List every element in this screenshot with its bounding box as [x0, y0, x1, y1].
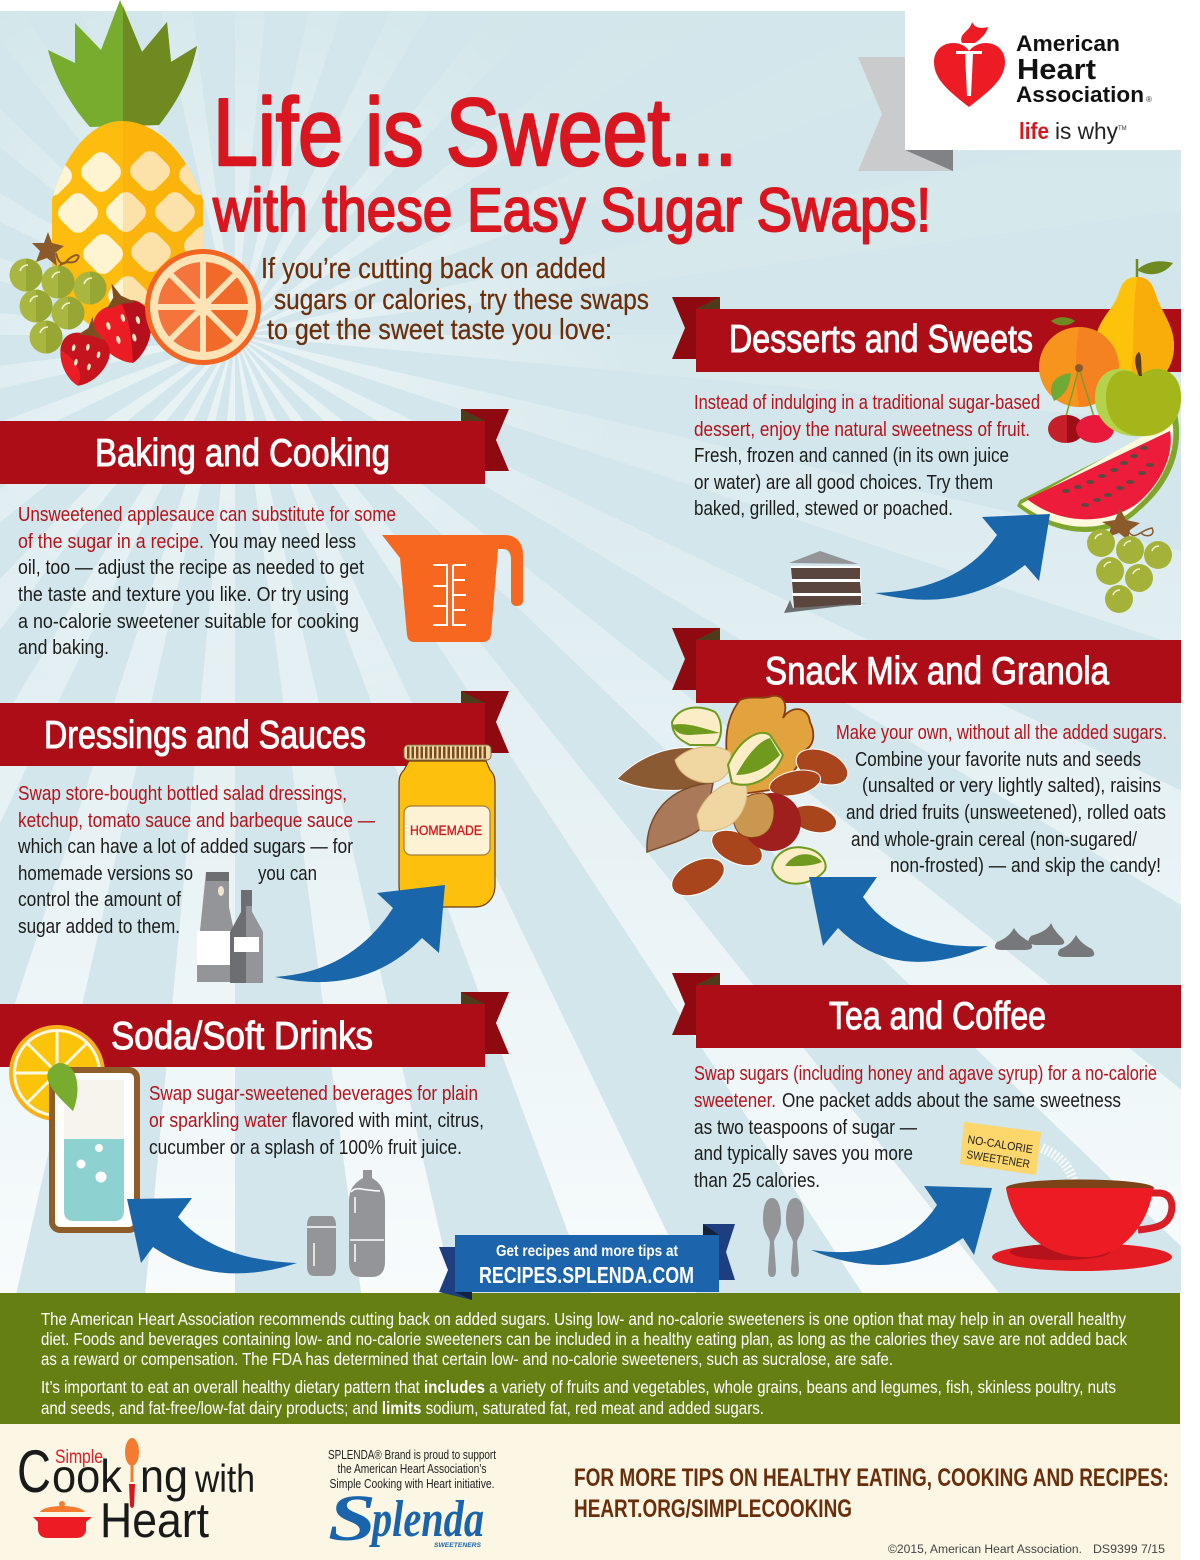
- body text: flavored with mint, citrus,: [292, 1109, 484, 1132]
- American Heart Association logo: Heart: [1017, 54, 1096, 86]
- body text: the taste and texture you like. Or try using: [18, 583, 349, 606]
- icon: lemon slice: [9, 1025, 105, 1121]
- body text: [17, 782, 375, 938]
- icon: homemade jar: HOMEMADE: [410, 822, 482, 838]
- body text: and baking.: [18, 636, 109, 659]
- ribbon heading: Soda/Soft Drinks: [111, 1015, 373, 1058]
- icon: homemade jar: [399, 745, 495, 907]
- intro text: [261, 253, 649, 346]
- callout: recipes banner: Get recipes and more tips at: [496, 1243, 679, 1260]
- panel: footer: [0, 1424, 1181, 1560]
- body text: [836, 721, 1167, 877]
- intro text: If you’re cutting back on added: [261, 253, 606, 285]
- logo ribbon: [858, 57, 953, 171]
- intro text: to get the sweet taste you love:: [267, 314, 612, 346]
- icon: spoons: [763, 1198, 804, 1277]
- icon: sweetener packet: NO-CALORIE: [967, 1134, 1034, 1156]
- body text: [149, 1082, 484, 1159]
- ribbon heading: Dressings and Sauces: [44, 714, 366, 757]
- ribbon heading: [672, 973, 1181, 1048]
- body text: a no-calorie sweetener suitable for cooking: [18, 610, 359, 633]
- icon: grapes top left: [10, 232, 106, 354]
- panel: dressings and sauces: [0, 691, 509, 983]
- title: with these Easy Sugar Swaps!: [212, 176, 931, 244]
- copyright: DS9399 7/15: [1093, 1544, 1165, 1556]
- body text: of the sugar in a recipe.: [18, 530, 204, 553]
- American Heart Association logo: ®: [1146, 95, 1152, 104]
- body text: ketchup, tomato sauce and barbeque sauce —: [18, 809, 375, 832]
- logo: Splenda: S: [328, 1482, 376, 1555]
- body text: or water) are all good choices. Try them: [694, 471, 993, 494]
- body text: Swap sugar-sweetened beverages for plain: [149, 1082, 478, 1105]
- logo: Simple Cooking with Heart: Simple: [55, 1447, 103, 1468]
- body text: [18, 503, 396, 659]
- body text: and typically saves you more: [694, 1142, 913, 1165]
- ribbon heading: Tea and Coffee: [829, 995, 1046, 1038]
- body text: [694, 391, 1040, 520]
- title: Life is Sweet...: [213, 79, 737, 186]
- callout: recipes banner: RECIPES.SPLENDA.COM: [479, 1262, 694, 1288]
- arrow: [275, 885, 445, 982]
- copyright: ©2015, American Heart Association.: [888, 1544, 1082, 1556]
- body text: You may need less: [209, 530, 356, 553]
- body text: One packet adds about the same sweetness: [782, 1089, 1121, 1112]
- icon: pineapple: [48, 0, 203, 333]
- logo: Simple Cooking with Heart: with: [194, 1458, 255, 1501]
- American Heart Association logo: [905, 11, 1181, 150]
- ribbon heading: Snack Mix and Granola: [765, 650, 1109, 693]
- icon: measuring cup: [382, 535, 523, 642]
- body text: [694, 1062, 1157, 1192]
- panel: tea and coffee: [672, 973, 1181, 1277]
- panel: green recommendation band: and seeds, and fat-free/low-fat dairy products; and limits sodium, saturated fat, red meat and added sugars.: [41, 1398, 764, 1418]
- logo: Simple Cooking with Heart: ng: [140, 1450, 188, 1502]
- ribbon heading: [672, 297, 1181, 372]
- American Heart Association logo: life: [1019, 118, 1049, 144]
- arrow: [809, 877, 988, 962]
- Splenda statement: the American Heart Association’s: [338, 1462, 486, 1476]
- icon: grapes right: [1087, 508, 1172, 613]
- panel: baking and cooking: [0, 409, 523, 659]
- copyright: [888, 1544, 1165, 1556]
- panel: green recommendation band: as a reward or compensation. The FDA has determined that certain low- and no-calorie sweeteners, such as sucralose, are safe.: [41, 1349, 893, 1369]
- call to action: HEART.ORG/SIMPLECOOKING: [574, 1495, 852, 1523]
- icon: fruit pile: [1017, 259, 1181, 532]
- body text: which can have a lot of added sugars — for: [17, 835, 353, 858]
- logo: Splenda: [328, 1482, 484, 1555]
- body text: and whole-grain cereal (non-sugared/: [851, 828, 1137, 851]
- body text: sugar added to them.: [18, 915, 180, 938]
- icon: can and soda bottle: [307, 1170, 385, 1277]
- panel: green recommendation band: [0, 1293, 1180, 1424]
- American Heart Association logo: is why: [1055, 118, 1118, 144]
- ribbon heading: [672, 628, 1181, 703]
- Splenda statement: [328, 1448, 496, 1491]
- body text: Instead of indulging in a traditional sugar-based: [694, 391, 1040, 414]
- icon: chocolate chips: [995, 923, 1094, 957]
- body text: Swap store-bought bottled salad dressings,: [18, 782, 347, 805]
- Splenda statement: Simple Cooking with Heart initiative.: [330, 1477, 494, 1491]
- body text: sweetener.: [694, 1089, 776, 1112]
- icon: store-bought bottles: [197, 872, 263, 983]
- panel: snack mix and granola: [617, 628, 1181, 962]
- icon: sweetener packet: SWEETENER: [966, 1149, 1031, 1171]
- panel: desserts and sweets: [672, 259, 1181, 613]
- body text: Unsweetened applesauce can substitute for some: [18, 503, 396, 526]
- logo: Splenda: SWEETENERS: [434, 1542, 482, 1549]
- call to action: [574, 1464, 1169, 1523]
- logo: Simple Cooking with Heart: Heart: [100, 1494, 209, 1548]
- arrow: [127, 1198, 297, 1273]
- arrow: [875, 514, 1050, 600]
- icon: glass of water: [47, 1063, 137, 1230]
- icon: mixed nuts: [617, 696, 853, 903]
- Splenda statement: SPLENDA® Brand is proud to support: [328, 1448, 496, 1462]
- body text: Combine your favorite nuts and seeds: [855, 748, 1141, 771]
- icon: sweetener packet: [960, 1122, 1075, 1186]
- body text: dessert, enjoy the natural sweetness of fruit.: [694, 418, 1030, 441]
- panel: soda and soft drinks: [0, 992, 509, 1277]
- ribbon heading: [0, 409, 509, 484]
- American Heart Association logo: TM: [1118, 126, 1127, 132]
- icon: cake slice: [784, 551, 867, 613]
- icon: orange slice: [145, 249, 261, 365]
- ribbon heading: [0, 992, 509, 1067]
- American Heart Association logo: American: [1016, 31, 1120, 56]
- title: [212, 79, 931, 244]
- body text: cucumber or a splash of 100% fruit juice.: [149, 1136, 462, 1159]
- panel: green recommendation band: It’s important to eat an overall healthy dietary pattern that includes a variety of fruits and vegetables, whole grains, beans and legumes, fish, skinless poultry, nuts: [41, 1377, 1116, 1397]
- callout: recipes banner: [439, 1224, 735, 1300]
- body text: non-frosted) — and skip the candy!: [890, 854, 1161, 877]
- icon: coffee cup: [992, 1180, 1172, 1271]
- body text: control the amount of: [18, 888, 181, 911]
- body text: homemade versions so: [18, 862, 193, 885]
- American Heart Association logo: Association: [1016, 82, 1144, 107]
- arrow: [811, 1186, 992, 1265]
- ribbon heading: Desserts and Sweets: [729, 318, 1033, 361]
- intro text: sugars or calories, try these swaps: [274, 284, 649, 316]
- body text: or sparkling water: [149, 1109, 287, 1132]
- body text: oil, too — adjust the recipe as needed to get: [18, 556, 364, 579]
- body text: baked, grilled, stewed or poached.: [694, 497, 953, 520]
- logo: Simple Cooking with Heart: [17, 1438, 255, 1548]
- logo: Simple Cooking with Heart: C: [17, 1438, 51, 1505]
- body text: Fresh, frozen and canned (in its own juice: [694, 444, 1009, 467]
- icon: strawberries: [54, 276, 161, 391]
- ribbon heading: [0, 691, 509, 766]
- body text: as two teaspoons of sugar —: [694, 1116, 917, 1139]
- logo: Simple Cooking with Heart: ook: [52, 1450, 123, 1502]
- body text: than 25 calories.: [694, 1169, 820, 1192]
- logo: Splenda: plenda: [369, 1491, 484, 1548]
- ribbon heading: Baking and Cooking: [95, 432, 390, 475]
- body text: you can: [258, 862, 317, 885]
